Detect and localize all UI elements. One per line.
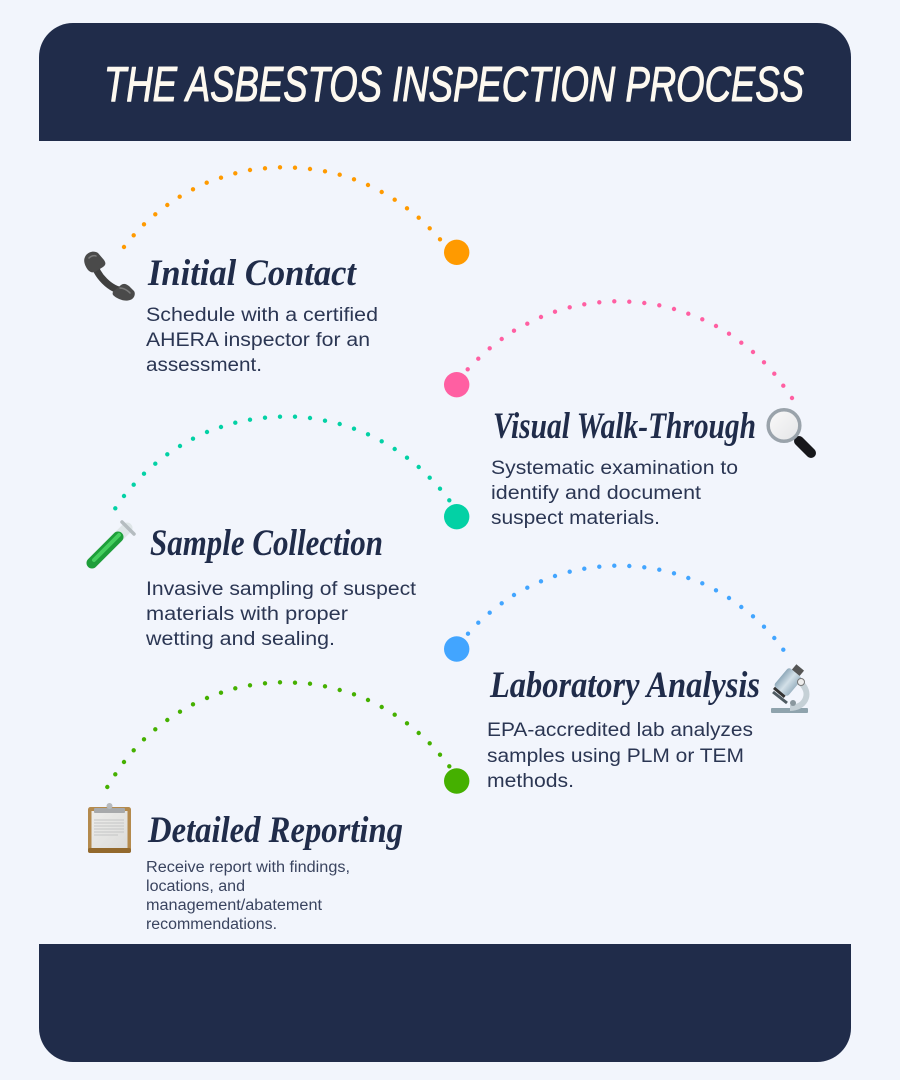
node: green xyxy=(444,768,469,794)
node: orange xyxy=(444,240,469,265)
dotted arc: green xyxy=(107,682,449,787)
description: Systematic examination to xyxy=(491,458,738,479)
heading: Initial Contact xyxy=(147,253,358,294)
heading: Visual Walk-Through xyxy=(493,406,756,447)
description xyxy=(487,720,753,792)
step 2: visual walk-through xyxy=(444,301,811,529)
description: suspect materials. xyxy=(491,508,660,529)
heading: Laboratory Analysis xyxy=(489,665,760,706)
description: management/abatement xyxy=(146,897,323,914)
description: materials with proper xyxy=(146,604,349,625)
description: locations, and xyxy=(146,878,245,895)
dotted arc: pink xyxy=(468,301,792,398)
heading: Sample Collection xyxy=(150,523,383,564)
description xyxy=(145,579,417,650)
step 3: sample collection xyxy=(92,417,469,650)
description: AHERA inspector for an xyxy=(146,330,370,351)
description: EPA-accredited lab analyzes xyxy=(487,720,753,741)
header band xyxy=(39,23,851,141)
description: assessment. xyxy=(146,355,262,376)
icon: clipboard xyxy=(88,803,131,853)
dotted arc: orange xyxy=(124,167,440,247)
icon: test tube xyxy=(92,522,134,563)
dotted arc: teal xyxy=(115,417,449,508)
step 5: detailed reporting xyxy=(88,682,469,933)
description xyxy=(146,859,350,933)
dotted arc: blue xyxy=(468,566,783,650)
step 4: laboratory analysis xyxy=(444,566,808,792)
description: wetting and sealing. xyxy=(145,629,335,650)
description: recommendations. xyxy=(146,916,277,933)
description: Schedule with a certified xyxy=(146,305,378,326)
description: methods. xyxy=(487,771,574,792)
node: blue xyxy=(444,636,469,662)
description xyxy=(146,305,378,376)
node: pink xyxy=(444,372,469,397)
description: samples using PLM or TEM xyxy=(487,746,744,767)
step 1: initial contact xyxy=(84,167,469,376)
description: identify and document xyxy=(491,483,702,504)
description: Receive report with findings, xyxy=(146,859,350,876)
description: Invasive sampling of suspect xyxy=(146,579,417,600)
description xyxy=(491,458,738,529)
node: teal xyxy=(444,504,469,529)
footer band xyxy=(39,944,851,1062)
icon: telephone xyxy=(84,252,135,301)
icon: microscope xyxy=(771,662,808,713)
heading: Detailed Reporting xyxy=(147,810,403,851)
icon: magnifying glass xyxy=(768,410,811,453)
